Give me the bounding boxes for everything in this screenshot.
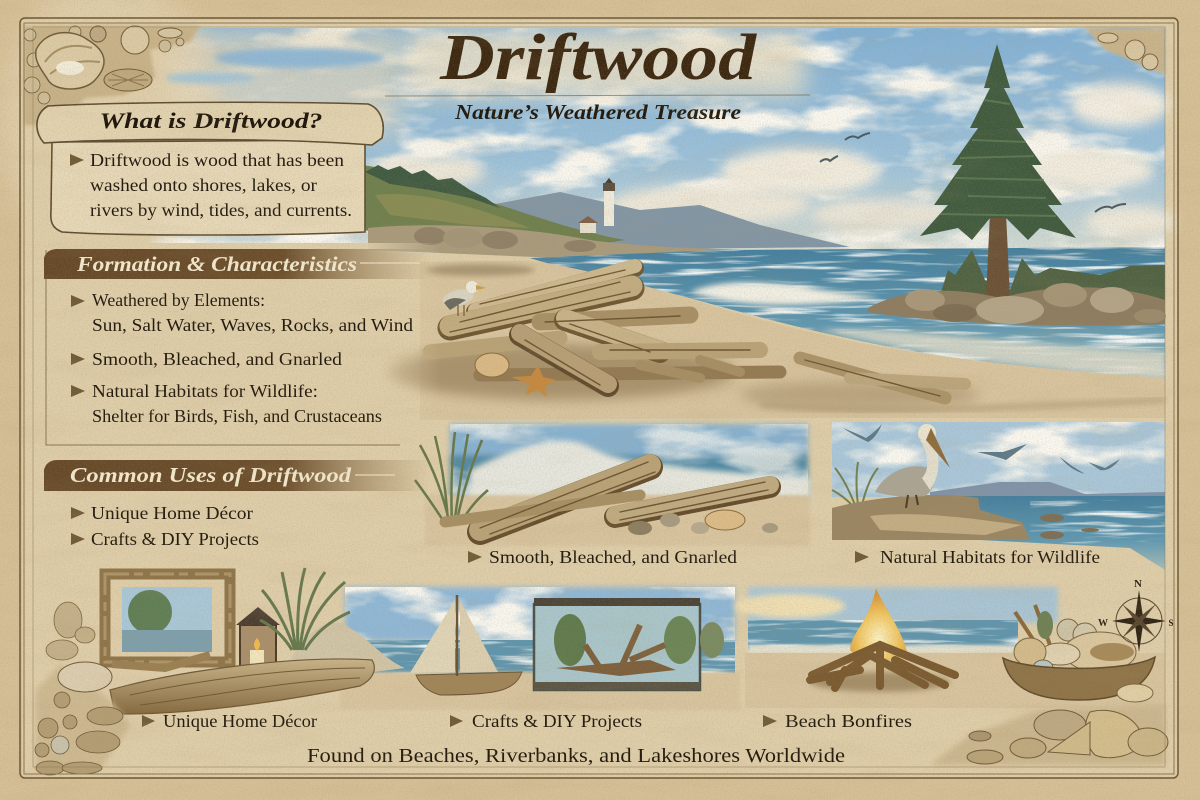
list: characteristics: Smooth, Bleached, and Gnarled xyxy=(92,349,342,369)
heading: formation: Formation & Characteristics xyxy=(76,252,357,276)
bonfire xyxy=(810,588,955,692)
heading: what is driftwood: What is Driftwood? xyxy=(100,108,322,133)
sand xyxy=(340,672,740,710)
heading: common uses xyxy=(44,460,430,491)
text block: definition xyxy=(90,150,352,220)
pine tree xyxy=(920,44,1076,298)
sand beach xyxy=(420,261,1165,420)
list: characteristics: Shelter for Birds, Fish, and Crustaceans xyxy=(92,406,382,426)
rocky shoreline xyxy=(368,225,745,258)
green headland xyxy=(362,165,625,250)
corner shells: top left xyxy=(24,26,200,125)
corner shells: bottom left xyxy=(35,662,130,775)
icon: compass rose: N xyxy=(1134,578,1142,590)
text block: definition: rivers by wind, tides, and currents. xyxy=(90,200,352,220)
list: common uses: Crafts & DIY Projects xyxy=(91,529,259,549)
band: formation heading xyxy=(44,249,430,279)
text block: definition: washed onto shores, lakes, or xyxy=(90,175,317,195)
shell and starfish xyxy=(475,353,556,397)
sky xyxy=(345,587,735,641)
birds xyxy=(843,424,1120,474)
list: characteristics: Weathered by Elements: xyxy=(92,290,265,310)
scroll header xyxy=(37,102,383,145)
seagull xyxy=(440,281,486,316)
icon: bullet xyxy=(70,154,84,166)
panel: what is driftwood xyxy=(37,102,383,235)
woven bowl of shells xyxy=(1003,605,1155,702)
aquarium xyxy=(534,598,700,690)
dune rock xyxy=(290,623,405,675)
stone wall beside frame xyxy=(46,602,95,660)
caption: beach bonfires: Beach Bonfires xyxy=(785,711,912,731)
panel: smooth bleached and gnarled scene xyxy=(415,415,818,546)
text block: definition: Driftwood is wood that has been xyxy=(90,150,344,170)
large log xyxy=(110,659,374,714)
title xyxy=(385,21,810,124)
panel: bonfire and shell basket xyxy=(735,587,1165,708)
corner shells: top right xyxy=(1085,28,1165,75)
panel: natural habitats scene xyxy=(832,422,1165,570)
caption: unique home decor: Unique Home Décor xyxy=(163,711,317,731)
title: Nature’s Weathered Treasure xyxy=(454,100,741,124)
divider flourish xyxy=(360,262,420,264)
rock xyxy=(832,495,1030,540)
lighthouse xyxy=(578,178,615,233)
panel: formation and characteristics xyxy=(44,243,441,445)
caption: crafts and diy projects: Crafts & DIY Projects xyxy=(472,711,642,731)
coastal plants beside aquarium xyxy=(700,622,724,658)
caption: natural habitats: Natural Habitats for Wildlife xyxy=(880,547,1100,567)
driftwood pile xyxy=(385,266,980,409)
logs xyxy=(445,462,770,534)
heading: common uses: Common Uses of Driftwood xyxy=(70,463,352,487)
toy sailboat xyxy=(410,595,522,695)
distant hills xyxy=(930,482,1165,500)
water xyxy=(960,496,1165,570)
panel: lower decor and crafts scene xyxy=(46,568,740,714)
driftwood picture frame xyxy=(105,574,230,668)
shoreline trees behind island xyxy=(940,250,1165,305)
rock island xyxy=(868,283,1166,326)
pebbles and shell xyxy=(628,510,778,535)
panel: main coastal scene xyxy=(0,0,1175,420)
distant hills xyxy=(490,192,850,250)
list: common uses: Unique Home Décor xyxy=(91,503,253,523)
icon: beach grass xyxy=(415,432,488,525)
caption: smooth bleached and gnarled: Smooth, Bleached, and Gnarled xyxy=(489,547,737,567)
flying birds xyxy=(820,133,1126,212)
list: common uses xyxy=(71,503,259,549)
pelican xyxy=(875,424,950,508)
list: characteristics xyxy=(71,290,413,426)
icon: compass rose: W xyxy=(1098,618,1108,629)
list: characteristics: Sun, Salt Water, Waves, Rocks, and Wind xyxy=(92,315,413,335)
sky xyxy=(0,0,1175,260)
sea xyxy=(530,247,1165,379)
beach grass xyxy=(260,568,350,650)
small rocks in water xyxy=(1040,514,1099,539)
corner shells: bottom right xyxy=(930,705,1168,765)
footer text: Found on Beaches, Riverbanks, and Lakeshores Worldwide xyxy=(307,745,845,767)
list: characteristics: Natural Habitats for Wildlife: xyxy=(92,381,318,401)
sea xyxy=(345,640,735,674)
icon: compass rose xyxy=(1098,578,1174,652)
lantern xyxy=(236,607,280,671)
grass xyxy=(832,462,878,505)
icon: compass rose: S xyxy=(1168,618,1174,628)
title: Driftwood xyxy=(439,21,757,94)
